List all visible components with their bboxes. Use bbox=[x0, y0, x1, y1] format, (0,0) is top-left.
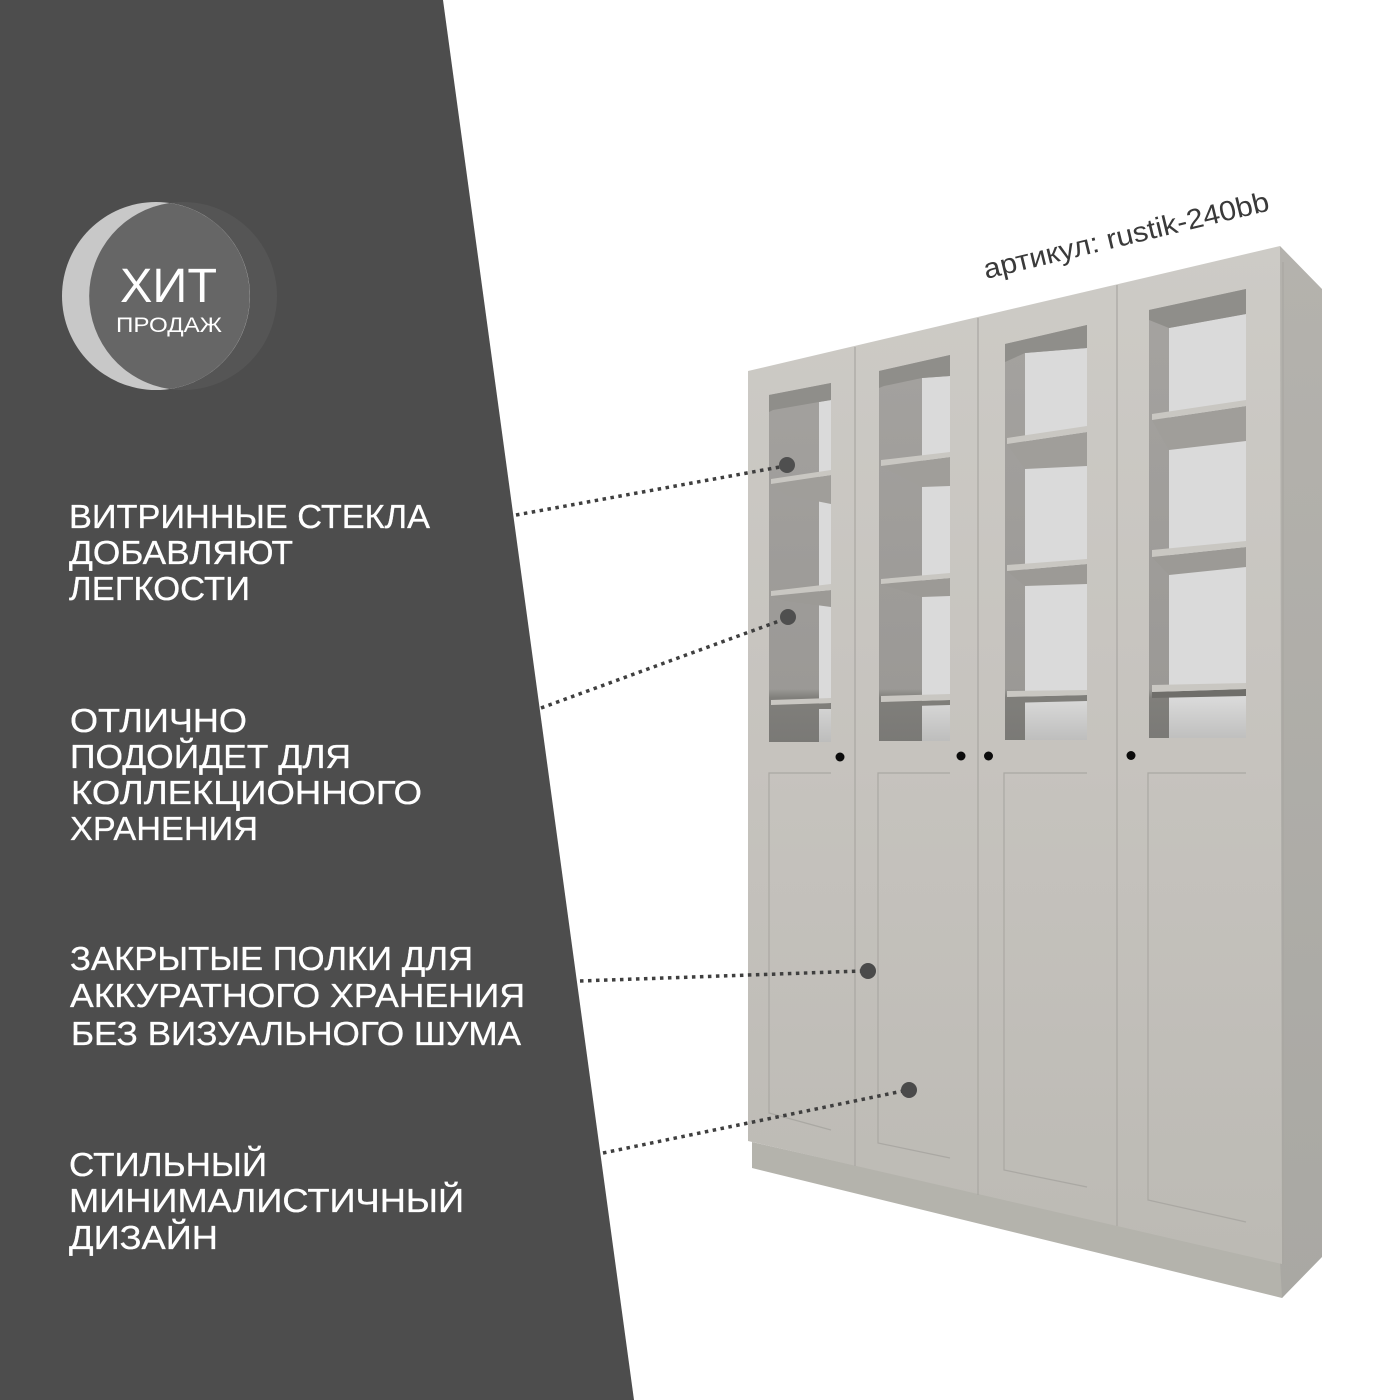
badge subtitle: ПРОДАЖ bbox=[116, 314, 223, 337]
cabinet plinth bbox=[752, 1142, 1322, 1298]
door handles bbox=[836, 751, 1136, 762]
callout: design bbox=[603, 1082, 917, 1153]
feature text: collection storage: ПОДОЙДЕТ ДЛЯ bbox=[70, 738, 351, 775]
feature text: collection storage: КОЛЛЕКЦИОННОГО bbox=[71, 774, 422, 811]
door seams bbox=[855, 262, 1283, 1264]
badge: faint outer circle bbox=[89, 202, 277, 390]
callout: collection bbox=[541, 609, 796, 708]
glass window: door 2 bbox=[879, 355, 950, 741]
badge: lens shape bbox=[89, 203, 250, 389]
badge title: ХИТ bbox=[120, 260, 217, 313]
feature text: closed shelves: АККУРАТНОГО ХРАНЕНИЯ bbox=[70, 977, 525, 1014]
glass window: door 4 bbox=[1149, 289, 1246, 738]
feature text: collection storage: ХРАНЕНИЯ bbox=[70, 810, 258, 847]
panel: dark background bbox=[0, 0, 634, 1400]
feature text: closed shelves bbox=[70, 940, 525, 1052]
feature text: minimal design: СТИЛЬНЫЙ bbox=[69, 1146, 267, 1183]
shelves bbox=[1152, 406, 1246, 450]
glass window: door 1 bbox=[769, 383, 831, 742]
cabinet side bbox=[1280, 246, 1322, 1298]
feature text: showcase glass: ВИТРИННЫЕ СТЕКЛА bbox=[69, 498, 430, 535]
feature text: closed shelves: ЗАКРЫТЫЕ ПОЛКИ ДЛЯ bbox=[70, 940, 473, 977]
shelves bbox=[771, 475, 831, 504]
bookcase bbox=[748, 246, 1322, 1298]
shelves bbox=[1007, 432, 1087, 469]
feature text: showcase glass: ЛЕГКОСТИ bbox=[69, 570, 250, 607]
feature text: showcase glass: ДОБАВЛЯЮТ bbox=[69, 534, 293, 571]
lower door panels bbox=[769, 773, 1246, 1222]
feature text: collection storage: ОТЛИЧНО bbox=[70, 702, 247, 739]
badge: bestseller bbox=[62, 202, 277, 390]
callout: closed shelves bbox=[580, 963, 876, 981]
feature text: minimal design bbox=[69, 1146, 464, 1256]
feature text: minimal design: ДИЗАЙН bbox=[69, 1219, 218, 1256]
feature text: closed shelves: БЕЗ ВИЗУАЛЬНОГО ШУМА bbox=[71, 1015, 521, 1052]
callout: glass shelf bbox=[516, 457, 795, 515]
cabinet front bbox=[748, 246, 1282, 1264]
feature text: minimal design: МИНИМАЛИСТИЧНЫЙ bbox=[69, 1182, 464, 1219]
glass window: door 3 bbox=[1005, 325, 1087, 740]
shelves bbox=[881, 457, 950, 487]
feature text: showcase glass bbox=[69, 498, 430, 607]
badge: light crescent bbox=[62, 202, 250, 390]
article number: артикул: rustik-240bb bbox=[980, 186, 1272, 285]
feature text: collection storage bbox=[70, 702, 422, 847]
